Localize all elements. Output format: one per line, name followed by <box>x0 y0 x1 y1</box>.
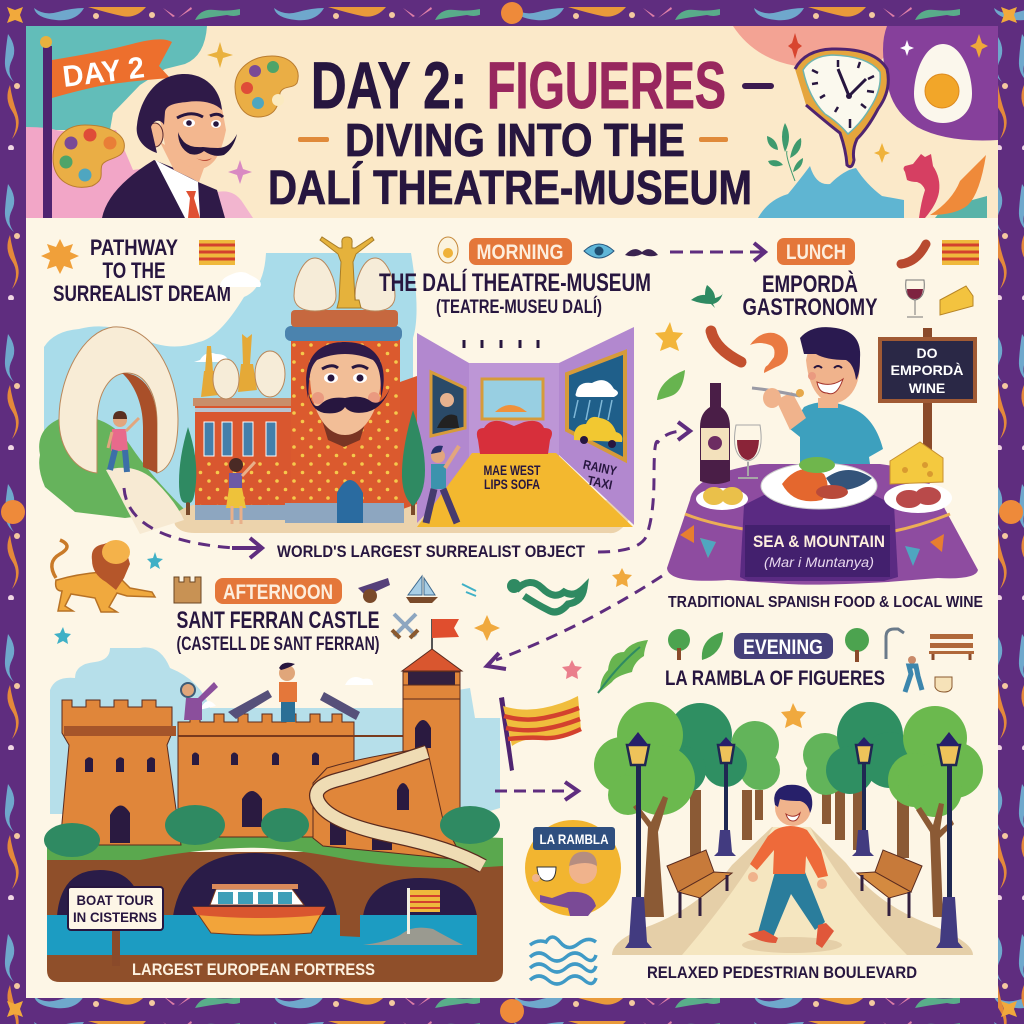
ramp arcade <box>313 748 463 860</box>
bridge and water <box>47 830 503 982</box>
gallery room <box>417 327 634 527</box>
visitor at arch <box>108 411 139 472</box>
afternoon tag: AFTERNOON <box>223 581 333 604</box>
title: DAY 2: <box>311 48 467 122</box>
header right purple blob <box>883 26 998 140</box>
gallery room: LIPS SOFA <box>484 477 540 492</box>
arrow: castle to rambla <box>495 782 578 800</box>
trees and visitors <box>179 410 459 524</box>
table: (Mar i Muntanya) <box>764 554 874 570</box>
egg arch <box>59 327 178 473</box>
heading: Dalí Theatre-Museum: (TEATRE-MUSEU DALÍ) <box>436 296 602 318</box>
back trees trunks <box>690 790 909 860</box>
grass band <box>47 830 503 868</box>
castle right tower <box>402 619 462 822</box>
title: FIGUERES <box>487 48 726 122</box>
sign: DO Empordà wine: WINE <box>909 380 945 396</box>
flag: Day 2: DAY 2 <box>61 51 146 94</box>
castle scene <box>44 619 500 866</box>
icon: lion <box>52 540 155 612</box>
icon: crossed swords <box>392 614 418 638</box>
portrait: Dalí <box>102 74 237 218</box>
heading: pathway: TO THE <box>102 258 166 283</box>
table <box>667 442 978 585</box>
evening tag <box>668 628 974 692</box>
icon: waves <box>530 937 596 984</box>
icon: palette left <box>53 125 124 187</box>
mid right foliage <box>826 702 918 794</box>
teal stars <box>54 552 163 644</box>
heading: Dalí Theatre-Museum: THE DALÍ THEATRE-MUSEUM <box>379 268 651 297</box>
right back foliage <box>803 733 847 795</box>
cannons and visitors <box>228 690 360 720</box>
castle windows and doors <box>85 752 319 843</box>
title <box>268 48 774 215</box>
shrubs <box>44 805 500 857</box>
museum: tower with Dalí face <box>285 310 404 523</box>
rambla scene <box>594 702 983 955</box>
icon: melting clock <box>795 49 888 167</box>
caption: largest European fortress: LARGEST EUROPEAN FORTRESS <box>132 960 375 979</box>
ceiling lights <box>464 340 538 348</box>
gold statue and roof eggs <box>294 237 395 311</box>
sparkle gold <box>874 143 890 163</box>
arrow: lunch to evening <box>487 576 662 669</box>
badge: La Rambla: LA RAMBLA <box>540 831 608 847</box>
sparkle white <box>900 40 914 56</box>
small gold stars <box>474 568 806 728</box>
gallery room: TAXI <box>586 473 614 493</box>
museum: red building <box>193 334 417 520</box>
header banner <box>26 26 998 218</box>
heading: pathway: SURREALIST DREAM <box>53 281 231 306</box>
pink star <box>562 660 582 679</box>
header left color blobs <box>26 26 207 130</box>
arrow: morning to lunch <box>670 243 765 261</box>
castle long wall <box>178 714 354 837</box>
winding ramp <box>317 752 483 866</box>
table: SEA & MOUNTAIN <box>753 532 885 551</box>
star sparkles header <box>207 42 233 68</box>
title: DIVING INTO THE <box>345 114 685 166</box>
badge: La Rambla <box>525 820 621 916</box>
big trunks <box>633 796 668 917</box>
afternoon tag <box>174 576 438 604</box>
sign: DO Empordà wine <box>880 328 975 453</box>
heading: Dalí Theatre-Museum <box>379 268 651 318</box>
pink star header <box>228 160 252 184</box>
icon: fried egg <box>914 44 972 123</box>
evening tag: EVENING <box>743 636 823 659</box>
heading: Empordà gastronomy: EMPORDÀ <box>762 270 858 298</box>
title: DALÍ THEATRE-MUSEUM <box>268 161 752 215</box>
mid left foliage <box>658 703 747 794</box>
gallery room: RAINY <box>582 457 618 479</box>
morning tag <box>438 237 658 265</box>
sign: DO Empordà wine: DO <box>916 345 938 361</box>
lunch icons <box>655 240 979 400</box>
bridge and water: IN CISTERNS <box>73 909 157 925</box>
icon: leaf sprig <box>767 123 803 181</box>
walking man <box>742 937 842 953</box>
icon: palette center <box>235 56 298 117</box>
heading: Sant Ferran Castle: (CASTELL DE SANT FERRAN) <box>176 634 380 655</box>
scene: museum sky and ground <box>39 253 633 534</box>
heading: Sant Ferran Castle <box>176 607 380 655</box>
heading: Sant Ferran Castle: SANT FERRAN CASTLE <box>176 607 380 634</box>
arrow head lunch <box>678 422 690 440</box>
icon: catalan flag small <box>199 240 235 265</box>
sign: DO Empordà wine: EMPORDÀ <box>890 362 964 378</box>
castle left tower <box>60 700 181 845</box>
morning tag: MORNING <box>476 241 564 264</box>
benches <box>667 850 714 892</box>
header sparkles right <box>788 33 802 59</box>
icon: green dragon <box>462 579 584 612</box>
heading: Empordà gastronomy: GASTRONOMY <box>742 294 878 321</box>
big right foliage <box>888 706 983 817</box>
heading: pathway <box>53 235 231 306</box>
heading: Empordà gastronomy <box>742 270 878 321</box>
icon: dragon <box>904 154 986 218</box>
lamps <box>636 760 952 900</box>
arrow: path to museum caption <box>124 488 234 548</box>
arrow: museum to lunch <box>598 431 682 552</box>
flag: Day 2 <box>40 36 172 218</box>
heading: pathway: PATHWAY <box>90 235 178 260</box>
man eating <box>752 327 883 485</box>
caption: pedestrian boulevard: RELAXED PEDESTRIAN BOULEVARD <box>647 963 917 982</box>
wine bottle and glass <box>700 383 761 484</box>
gallery room: MAE WEST <box>484 463 541 478</box>
left foliage <box>731 721 780 790</box>
header salmon blob <box>733 26 891 67</box>
heading: La Rambla: LA RAMBLA OF FIGUERES <box>665 667 885 690</box>
caption: traditional Spanish food: TRADITIONAL SPANISH FOOD & LOCAL WINE <box>668 594 983 611</box>
icon: sun star <box>41 239 79 274</box>
arrowhead to caption <box>232 538 262 558</box>
sparkle orange <box>970 34 988 58</box>
leaf <box>598 640 648 693</box>
bridge and water: BOAT TOUR <box>76 892 154 908</box>
caption: largest surrealist object: WORLD'S LARGEST SURREALIST OBJECT <box>277 542 586 561</box>
lunch tag: LUNCH <box>786 241 846 264</box>
catalan flag waving <box>499 696 581 771</box>
waves <box>758 166 904 218</box>
big left foliage <box>594 702 695 815</box>
